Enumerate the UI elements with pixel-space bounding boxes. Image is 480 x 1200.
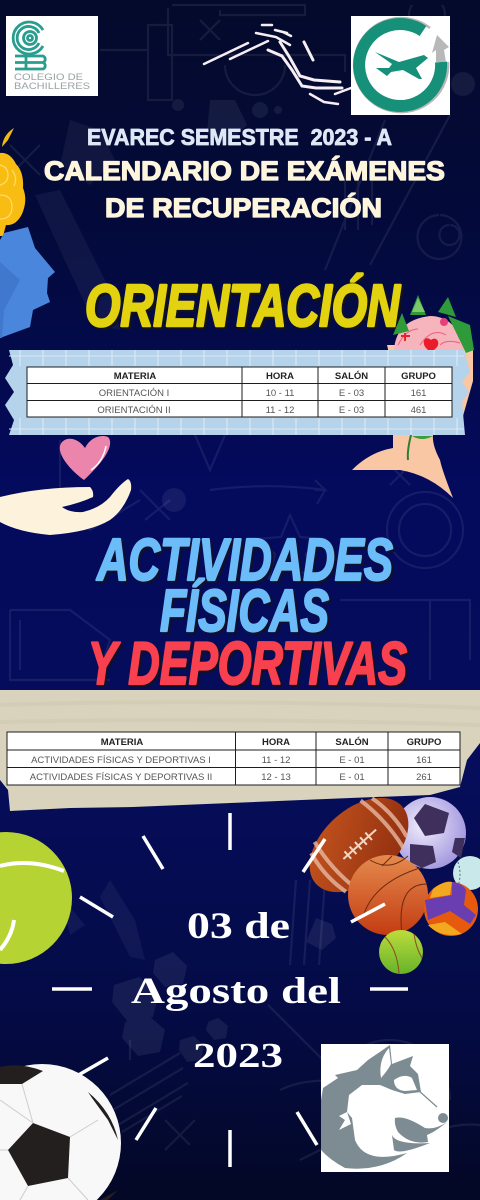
table: orientation: SALÓN xyxy=(335,370,368,382)
table: physical activities: HORA xyxy=(262,737,290,748)
table: physical activities: E - 01 xyxy=(339,772,365,783)
table: orientation: 461 xyxy=(411,405,426,416)
table: physical activities: E - 01 xyxy=(339,755,365,766)
logo: husky wolf xyxy=(321,1044,449,1172)
table: physical activities: SALÓN xyxy=(335,736,369,748)
logo: Colegio de Bachilleres xyxy=(6,16,98,96)
table: physical activities: 261 xyxy=(416,772,432,783)
ball: basketball xyxy=(348,855,428,935)
title line 1: CALENDARIO DE EXÁMENES xyxy=(44,155,445,186)
date line 1: 03 de xyxy=(187,906,290,947)
table: physical activities xyxy=(7,732,460,785)
date text xyxy=(131,906,341,1075)
title xyxy=(44,124,445,223)
illustration: head with pink brain and leaves xyxy=(352,295,474,498)
heading line: Físicas: FÍSICAS xyxy=(162,580,331,646)
ball: small tennis xyxy=(379,930,423,974)
illustration: big tennis ball xyxy=(0,832,72,964)
table: orientation: HORA xyxy=(266,371,294,382)
decorative white brush streak xyxy=(204,25,351,104)
logo: Colegio de Bachilleres: BACHILLERES xyxy=(14,81,90,91)
table: physical activities: MATERIA xyxy=(101,737,143,748)
illustration: head with yellow brain xyxy=(0,128,55,338)
table: physical activities: ACTIVIDADES FÍSICAS Y DEPORTIVAS II xyxy=(30,772,212,783)
ball: volleyball xyxy=(424,882,478,936)
table: orientation: E - 03 xyxy=(339,405,364,416)
icon: heart xyxy=(60,436,110,480)
subtitle: EVAREC: EVAREC SEMESTRE 2023 - A xyxy=(87,124,392,150)
table: physical activities: ACTIVIDADES FÍSICAS Y DEPORTIVAS I xyxy=(31,755,211,766)
table: orientation: MATERIA xyxy=(114,371,156,382)
table: physical activities: 12 - 13 xyxy=(261,772,291,783)
table: orientation: GRUPO xyxy=(401,371,436,382)
ball: football xyxy=(292,779,426,911)
table: orientation xyxy=(27,367,452,417)
icon: open hand xyxy=(0,479,131,535)
table: physical activities: 11 - 12 xyxy=(262,755,290,766)
ball: baseball xyxy=(453,856,480,890)
illustration: soccer ball xyxy=(0,1064,121,1200)
table: orientation: ORIENTACIÓN II xyxy=(97,405,171,416)
heading: Actividades Físicas y Deportivas xyxy=(88,527,409,699)
title line 2: DE RECUPERACIÓN xyxy=(105,192,382,223)
panel: orientation table band xyxy=(5,350,470,435)
logo: airplane circular arrow xyxy=(351,16,450,115)
table: physical activities: 161 xyxy=(416,755,432,766)
table: orientation: ORIENTACIÓN I xyxy=(99,388,169,399)
illustration: sports balls xyxy=(292,779,480,974)
date line 2: Agosto del xyxy=(131,971,341,1012)
date line 3: 2023 xyxy=(193,1036,283,1075)
table: orientation: 161 xyxy=(411,388,426,399)
panel: torn paper with sports table xyxy=(0,690,480,811)
table: orientation: 10 - 11 xyxy=(266,388,294,399)
table: orientation: E - 03 xyxy=(339,388,364,399)
table: orientation: 11 - 12 xyxy=(266,405,294,416)
date rays xyxy=(52,813,408,1167)
table: physical activities: GRUPO xyxy=(407,737,441,748)
logo: Colegio de Bachilleres: COLEGIO DE xyxy=(14,72,83,82)
ball: soccer purple xyxy=(394,797,466,869)
heading line: Físicas: FÍSICAS xyxy=(160,578,329,644)
